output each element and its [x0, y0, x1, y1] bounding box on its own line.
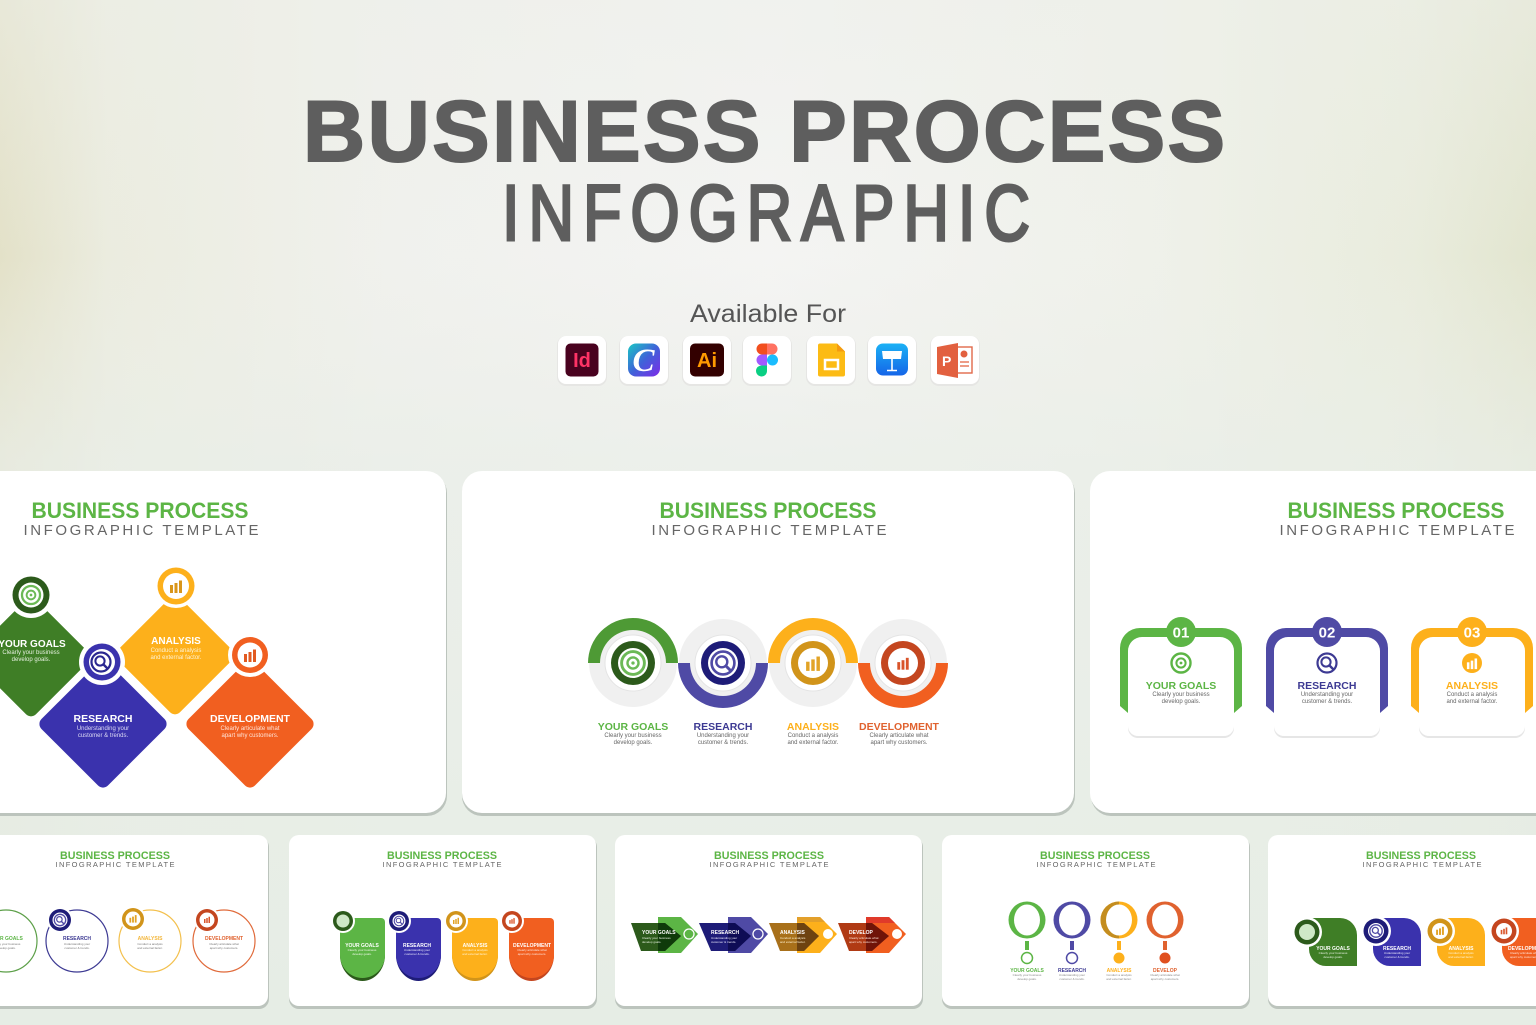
card 02 [1266, 617, 1388, 738]
step: research: Understanding your [697, 733, 749, 739]
card: research [387, 909, 441, 981]
step: research: customer & trends. [698, 740, 749, 746]
panel: numbered cards [1090, 471, 1536, 816]
diamond: analysis: Conduct a analysis [151, 648, 201, 654]
card 01: YOUR GOALS [1146, 680, 1216, 692]
icon: Keynote [867, 336, 917, 386]
arrow: research: customer & trends. [711, 940, 736, 944]
panel: shield cards [289, 835, 597, 1009]
arrow: development: Clearly articulate what [849, 936, 879, 940]
card: research: customer & trends. [1384, 955, 1410, 959]
card 01: develop goals. [1162, 699, 1201, 705]
icon: Google Slides [806, 336, 856, 386]
panel heading [56, 850, 174, 869]
card: research: Understanding your [404, 948, 430, 952]
card: analysis: and external factor. [1448, 955, 1474, 959]
title: BUSINESS PROCESS [303, 84, 1225, 180]
card: analysis: and external factor. [462, 952, 488, 956]
app icons row [557, 336, 980, 386]
card: research: RESEARCH [403, 943, 431, 949]
circle: research [46, 907, 108, 972]
panel heading [1362, 850, 1482, 869]
card: your goals [1292, 917, 1357, 966]
ring: analysis: and external factor. [1106, 977, 1132, 981]
circle: analysis: Conduct a analysis [137, 942, 163, 946]
step: your goals: Clearly your business [604, 733, 662, 739]
diamond: your goals: YOUR GOALS [0, 639, 66, 650]
panel heading: INFOGRAPHIC TEMPLATE [710, 860, 828, 869]
ring: analysis: Conduct a analysis [1106, 973, 1132, 977]
panel heading: BUSINESS PROCESS [60, 850, 170, 862]
circle: development: DEVELOPMENT [205, 936, 243, 942]
ring: your goals: develop goals. [1017, 977, 1037, 981]
card 01: Clearly your business [1152, 692, 1210, 698]
step: your goals [588, 618, 678, 746]
panel heading: INFOGRAPHIC TEMPLATE [1036, 860, 1156, 869]
arrow: research [699, 917, 768, 953]
card: analysis: ANALYSIS [1449, 946, 1474, 952]
card: research: Understanding your [1384, 951, 1410, 955]
card 03: 03 [1464, 624, 1480, 642]
circle: research: RESEARCH [63, 936, 91, 942]
step: research [678, 619, 768, 746]
card: your goals: Clearly your business [348, 948, 377, 952]
icon: Illustrator: Ai [697, 350, 717, 372]
diamond: development: apart why customers. [221, 733, 279, 739]
icon: PowerPoint [930, 336, 980, 386]
card: analysis: ANALYSIS [463, 943, 488, 949]
title: INFOGRAPHIC [502, 169, 1030, 258]
icon: Canva [619, 336, 669, 386]
card: analysis [444, 909, 498, 981]
arrow: your goals: YOUR GOALS [642, 930, 676, 936]
circle: development [193, 907, 255, 972]
panel heading: BUSINESS PROCESS [32, 498, 248, 523]
arrow: your goals: develop goals. [642, 940, 662, 944]
ring: develop [1146, 902, 1184, 981]
panel heading: BUSINESS PROCESS [714, 850, 824, 862]
panel heading [1280, 498, 1514, 539]
card: your goals: develop goals. [352, 952, 372, 956]
card 03: and external factor. [1446, 699, 1498, 705]
panel heading [652, 498, 886, 539]
circle: analysis [119, 906, 181, 972]
diamond: research: Understanding your [77, 726, 129, 732]
step: analysis: Conduct a analysis [788, 733, 838, 739]
step: your goals: develop goals. [614, 740, 653, 746]
card: analysis: Conduct a analysis [1448, 951, 1474, 955]
arrow: development [838, 917, 906, 953]
panel heading: INFOGRAPHIC TEMPLATE [1280, 522, 1514, 539]
card 02: 02 [1319, 624, 1335, 642]
card 02: RESEARCH [1298, 680, 1356, 692]
card: development: DEVELOPMENT [513, 943, 551, 949]
arrow: development: DEVELOP [849, 930, 874, 936]
card: development: apart why customers. [518, 952, 546, 956]
ring: analysis: ANALYSIS [1107, 968, 1132, 974]
step: development: DEVELOPMENT [859, 721, 940, 733]
ring: research [1054, 902, 1090, 981]
step: development [858, 619, 948, 746]
step: analysis: and external factor. [787, 740, 839, 746]
step: development: apart why customers. [870, 740, 928, 746]
panel heading: BUSINESS PROCESS [387, 850, 497, 862]
card 03: ANALYSIS [1446, 680, 1498, 692]
panel heading: BUSINESS PROCESS [1288, 498, 1504, 523]
step: research: RESEARCH [694, 721, 752, 733]
diamond: development [184, 633, 316, 790]
panel heading [710, 850, 828, 869]
card: analysis: Conduct a analysis [462, 948, 488, 952]
circle: research: customer & trends. [64, 946, 90, 950]
panel heading: BUSINESS PROCESS [660, 498, 876, 523]
arrow: analysis: Conduct a analysis [780, 936, 806, 940]
panel heading: INFOGRAPHIC TEMPLATE [24, 522, 258, 539]
circle: your goals [0, 910, 37, 972]
arrow: your goals [631, 917, 698, 953]
panel: half rings [462, 471, 1075, 816]
ring: research: customer & trends. [1059, 977, 1085, 981]
arrow: your goals: Clearly your business [642, 936, 671, 940]
card: your goals [331, 909, 385, 981]
card: research [1361, 916, 1421, 966]
icon: Figma [742, 336, 792, 386]
diamond: research: customer & trends. [78, 733, 129, 739]
panel: magnifier rings [942, 835, 1250, 1009]
ring: research: Understanding your [1059, 973, 1085, 977]
card: your goals: YOUR GOALS [1316, 946, 1350, 952]
title [303, 84, 1225, 258]
card: analysis [1425, 916, 1485, 966]
ring: analysis [1100, 902, 1138, 981]
card: your goals: YOUR GOALS [345, 943, 379, 949]
circle: analysis: and external factor. [137, 946, 163, 950]
panel heading [1036, 850, 1156, 869]
arrow: analysis: and external factor. [780, 940, 806, 944]
circle: development: Clearly articulate what [209, 942, 239, 946]
arrow: analysis [769, 917, 837, 953]
panel: outline circles [0, 835, 269, 1009]
circle: research: Understanding your [64, 942, 90, 946]
step: your goals: YOUR GOALS [598, 721, 668, 733]
ring: research: RESEARCH [1058, 968, 1086, 974]
ring: your goals: Clearly your business [1013, 973, 1042, 977]
card: development: Clearly articulate what [517, 948, 547, 952]
card 01: 01 [1173, 624, 1189, 642]
ring: your goals [1008, 902, 1046, 981]
diamond: analysis: ANALYSIS [151, 636, 201, 647]
step: development: Clearly articulate what [869, 733, 929, 739]
panel: arrows [615, 835, 923, 1009]
panel heading: INFOGRAPHIC TEMPLATE [56, 860, 174, 869]
panel heading: INFOGRAPHIC TEMPLATE [382, 860, 502, 869]
card: research: customer & trends. [404, 952, 430, 956]
circle: analysis: ANALYSIS [138, 936, 163, 942]
diamond: analysis: and external factor. [150, 655, 202, 661]
card: development [500, 909, 554, 981]
card 02: customer & trends. [1302, 699, 1353, 705]
panel heading [382, 850, 502, 869]
ring: your goals: YOUR GOALS [1010, 968, 1044, 974]
circle: development: apart why customers. [210, 946, 238, 950]
step: analysis [768, 618, 858, 746]
panel heading: INFOGRAPHIC TEMPLATE [1362, 860, 1482, 869]
arrow: development: apart why customers. [849, 940, 878, 944]
card: development [1489, 916, 1536, 966]
card: your goals: Clearly your business [1319, 951, 1348, 955]
arrow: research: Understanding your [711, 936, 737, 940]
panel heading: INFOGRAPHIC TEMPLATE [652, 522, 886, 539]
arrow: analysis: ANALYSIS [780, 930, 805, 936]
diamond: analysis [113, 564, 237, 717]
diamond: research [37, 639, 169, 790]
diamond: your goals [0, 572, 93, 719]
card: your goals: develop goals. [1323, 955, 1343, 959]
icon: InDesign [557, 336, 607, 386]
ring: develop: DEVELOP [1153, 968, 1178, 974]
step: analysis: ANALYSIS [787, 721, 839, 733]
ring: develop: Clearly articulate what [1150, 973, 1180, 977]
icon: InDesign: Id [573, 350, 591, 372]
panel: leaf cards [1268, 835, 1536, 1009]
card 03 [1411, 617, 1533, 738]
panel heading: BUSINESS PROCESS [1040, 850, 1150, 862]
diamond: research: RESEARCH [74, 713, 132, 725]
diamond: your goals: Clearly your business [2, 650, 60, 656]
diamond: your goals: develop goals. [12, 657, 51, 663]
panel heading [24, 498, 258, 539]
card 01 [1120, 617, 1242, 738]
card 02: Understanding your [1301, 692, 1353, 698]
ring: develop: apart why customers. [1151, 977, 1179, 981]
diamond: development: DEVELOPMENT [210, 713, 291, 725]
icon: PowerPoint: P [942, 353, 951, 369]
icon: Canva: C [632, 343, 655, 379]
available for label: Available For [690, 300, 846, 328]
panel: diamonds [0, 471, 447, 816]
icon: Illustrator [682, 336, 732, 386]
diamond: development: Clearly articulate what [220, 726, 280, 732]
panel heading: BUSINESS PROCESS [1366, 850, 1476, 862]
card: research: RESEARCH [1383, 946, 1411, 952]
card 03: Conduct a analysis [1447, 692, 1497, 698]
arrow: research: RESEARCH [711, 930, 739, 936]
